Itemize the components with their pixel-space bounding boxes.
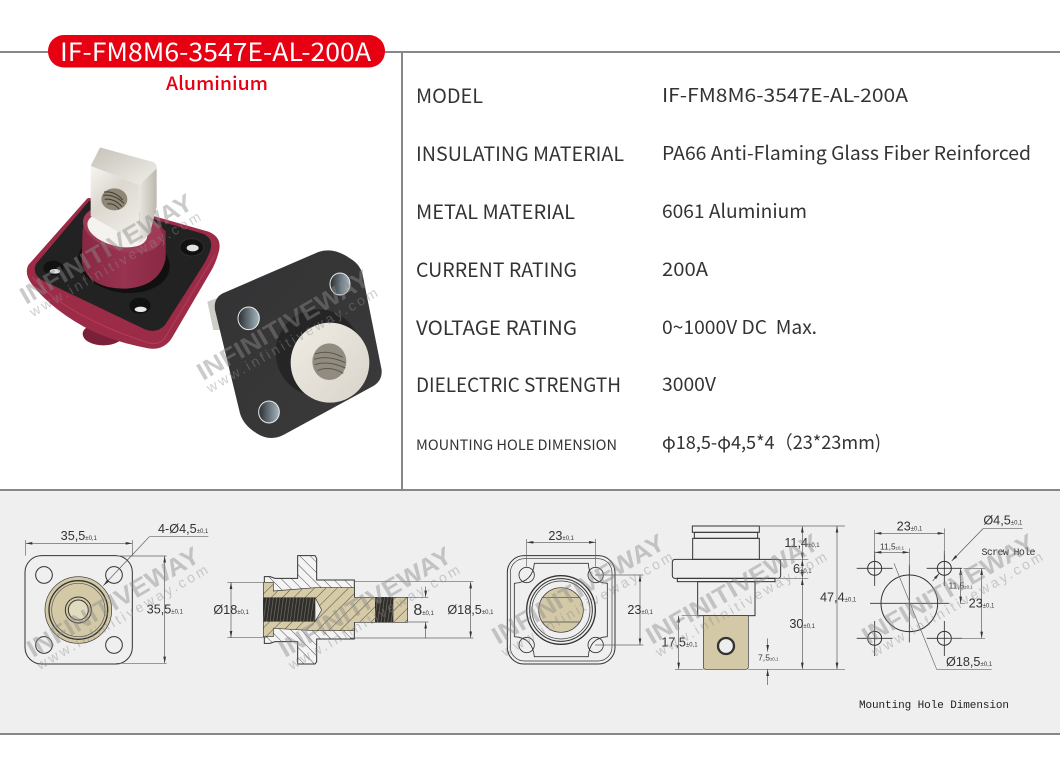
watermarks: INFINITIVEWAY bbox=[22, 542, 205, 663]
dimensions: 35,5±0,1 bbox=[147, 603, 184, 617]
dimensions bbox=[26, 522, 209, 663]
dimensions: Ø18,5±0,1 bbox=[946, 655, 993, 669]
row: voltage rating bbox=[416, 312, 817, 341]
housing bevel bbox=[32, 255, 215, 344]
watermarks: www.infinitiveway.com bbox=[652, 548, 829, 660]
corner holes bbox=[519, 567, 603, 653]
watermarks: www.infinitiveway.com bbox=[868, 548, 1045, 660]
dimensions: Ø18,5±0,1 bbox=[447, 603, 494, 617]
dimensions: 11,5±0,1 bbox=[880, 542, 905, 552]
hub bbox=[276, 309, 361, 396]
watermarks bbox=[15, 189, 1045, 673]
panel top rule bbox=[0, 489, 1060, 491]
red lower boss bbox=[83, 323, 124, 345]
row: current rating: 200A bbox=[662, 255, 708, 282]
centre terminal bbox=[45, 577, 112, 643]
blade hole bbox=[718, 638, 734, 654]
threaded bore bbox=[312, 343, 346, 380]
drawing: mounting hole dimension bbox=[857, 514, 1023, 669]
mounting holes bbox=[238, 273, 350, 423]
dimensions: 23±0,1 bbox=[627, 603, 654, 617]
row: model bbox=[416, 80, 908, 109]
dimensions bbox=[527, 529, 654, 645]
drawing: cross section bbox=[213, 556, 494, 664]
dimensions: 47,4±0,1 bbox=[820, 590, 857, 604]
dimensions: 11,5±0,1 bbox=[949, 581, 973, 591]
gasket ring bbox=[74, 227, 174, 299]
black housing bbox=[215, 250, 382, 438]
cylinder rim bbox=[78, 198, 168, 261]
insulating housing bbox=[264, 556, 354, 664]
dimensions: 8±0,1 bbox=[413, 602, 434, 619]
inner gasket outline bbox=[514, 563, 607, 657]
row: insulating material bbox=[416, 138, 1031, 167]
dimensions: 6±0,1 bbox=[793, 562, 812, 576]
product photo: black connector bbox=[207, 250, 382, 438]
red housing bbox=[27, 198, 220, 349]
column divider bbox=[401, 52, 403, 490]
dimensions: 30±0,1 bbox=[789, 617, 816, 631]
cylinder bbox=[82, 208, 166, 289]
row: current rating bbox=[416, 254, 708, 283]
row: model: IF-FM8M6-3547E-AL-200A bbox=[662, 81, 908, 108]
metal conductor bbox=[263, 582, 408, 637]
watermarks: INFINITIVEWAY bbox=[16, 189, 198, 310]
row: voltage rating: VOLTAGE RATING bbox=[416, 312, 577, 341]
material subtitle: Aluminium bbox=[166, 70, 268, 96]
gasket holes bbox=[43, 239, 204, 314]
panel bottom rule bbox=[0, 733, 1060, 735]
watermarks: INFINITIVEWAY bbox=[642, 529, 824, 650]
dimensions: 7,5±0,1 bbox=[758, 652, 779, 662]
row: metal material: 6061 Aluminium bbox=[662, 197, 807, 224]
row: metal material: METAL MATERIAL bbox=[416, 196, 575, 225]
dimensions: 11,4±0,1 bbox=[784, 536, 820, 550]
row: dielectric strength: DIELECTRIC STRENGTH bbox=[416, 369, 621, 398]
threaded bore bbox=[263, 597, 315, 622]
watermarks: INFINITIVEWAY bbox=[488, 529, 670, 650]
watermarks: www.infinitiveway.com bbox=[26, 208, 203, 320]
watermarks: INFINITIVEWAY bbox=[192, 265, 375, 386]
bottom drawings panel background bbox=[0, 490, 1060, 734]
dimensions: Ø18±0,1 bbox=[213, 603, 250, 617]
cylinder opening bbox=[84, 207, 151, 253]
row: dielectric strength: 3000V bbox=[662, 370, 716, 397]
centre terminal bbox=[527, 576, 595, 644]
metal ring bbox=[291, 323, 369, 403]
tang thread bbox=[375, 597, 393, 622]
row: mounting hole dimension: φ18,5-φ4,5*4（23*23mm) bbox=[662, 429, 881, 455]
product photo: red connector bbox=[27, 147, 220, 349]
watermarks: www.infinitiveway.com bbox=[498, 548, 675, 660]
drawing: front view bbox=[25, 522, 209, 664]
drawing: side view bbox=[661, 526, 857, 685]
dimensions: 35,5±0,1 bbox=[61, 529, 98, 543]
drawing: rear view bbox=[507, 529, 654, 664]
side pin bbox=[207, 298, 222, 330]
watermarks: www.infinitiveway.com bbox=[285, 561, 462, 673]
note: mounting hole dimension: Mounting Hole Dimension bbox=[859, 700, 1009, 712]
top rule bbox=[0, 51, 1060, 53]
row: model: MODEL bbox=[416, 80, 483, 109]
row: mounting hole dimension bbox=[416, 429, 881, 455]
bore tip bbox=[315, 597, 322, 622]
blade bbox=[703, 616, 748, 669]
specification table bbox=[416, 80, 1031, 455]
dimensions: 17,5±0,1 bbox=[661, 635, 698, 649]
dimensions: 4-Ø4,5±0,1 bbox=[158, 522, 209, 536]
watermarks: INFINITIVEWAY bbox=[858, 529, 1040, 650]
dimensions bbox=[213, 582, 494, 638]
screw holes bbox=[36, 567, 122, 653]
black gasket bbox=[35, 201, 211, 331]
watermarks: www.infinitiveway.com bbox=[203, 284, 380, 396]
title pill: IF-FM8M6-3547E-AL-200A bbox=[60, 33, 372, 69]
hole pattern bbox=[857, 551, 962, 656]
dimensions bbox=[875, 514, 1023, 669]
row: voltage rating: 0~1000V DC Max. bbox=[662, 313, 817, 340]
dimensions: 23±0,1 bbox=[969, 597, 995, 611]
dimensions: Ø4,5±0,1 bbox=[983, 514, 1023, 528]
dimensions bbox=[661, 526, 857, 685]
dimensions: 23±0,1 bbox=[548, 529, 575, 543]
row: current rating: CURRENT RATING bbox=[416, 254, 577, 283]
dimensions: 23±0,1 bbox=[897, 520, 923, 534]
row: metal material bbox=[416, 196, 807, 225]
cap and body bbox=[672, 526, 781, 616]
note: screw hole: Screw Hole bbox=[982, 547, 1036, 559]
row: insulating material: PA66 Anti-Flaming Glass Fiber Reinforced bbox=[662, 139, 1031, 166]
row: mounting hole dimension: MOUNTING HOLE DIMENSION bbox=[416, 434, 617, 455]
row: insulating material: INSULATING MATERIAL bbox=[416, 138, 624, 167]
watermarks: INFINITIVEWAY bbox=[274, 542, 457, 663]
metal tang bbox=[91, 147, 157, 243]
watermarks: www.infinitiveway.com bbox=[33, 561, 210, 673]
